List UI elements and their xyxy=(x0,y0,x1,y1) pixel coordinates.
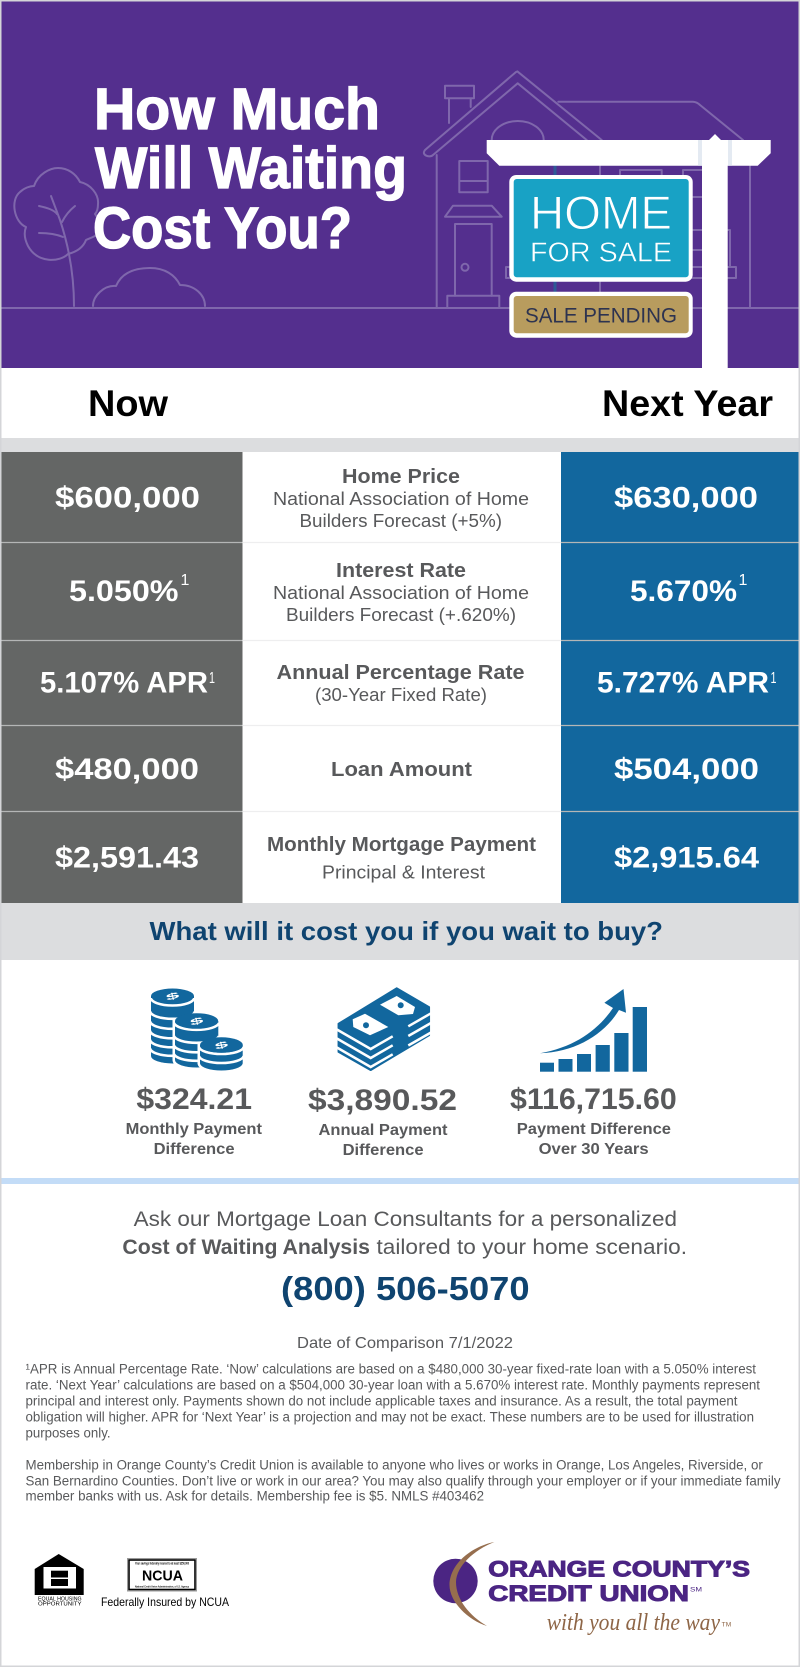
footnote: membership: San Bernardino Counties. Don’t live or work in our area? You may also qualify through your employer or if your immediate family xyxy=(26,1473,781,1488)
row: interest rate: Interest Rate xyxy=(336,560,466,582)
stat: monthly difference xyxy=(126,1083,263,1158)
row: interest rate: Builders Forecast (+.620%) xyxy=(286,605,516,625)
sign: home for sale: FOR SALE xyxy=(530,237,672,268)
row: annual percentage rate: (30-Year Fixed Rate) xyxy=(315,685,487,705)
row: loan amount: $504,000 xyxy=(614,753,759,786)
stat: monthly difference: Difference xyxy=(154,1141,235,1158)
logo: orange county's credit union: CREDIT UNION xyxy=(488,1581,689,1606)
panel: hero header xyxy=(2,2,798,368)
row: loan amount: $480,000 xyxy=(55,753,199,786)
illustration: blue drop line xyxy=(554,165,556,292)
row: monthly mortgage payment: Monthly Mortgage Payment xyxy=(267,834,536,856)
title: Cost You? xyxy=(93,196,352,261)
footnote: apr disclosure: ¹APR is Annual Percentage Rate. ‘Now’ calculations are based on a $480,000 30-year fixed-rate loan with a 5.050% interest xyxy=(26,1361,756,1376)
footnote: membership: member banks with us. Ask for details. Membership fee is $5. NMLS #403462 xyxy=(26,1488,484,1504)
footnote: apr disclosure: obligation will higher. APR for ‘Next Year’ is a projection and may not be exact. These numbers are to be used for illustration xyxy=(26,1409,754,1424)
row: annual percentage rate: 1 xyxy=(770,670,777,687)
logo: orange county's credit union: TM xyxy=(722,1622,731,1629)
logo: orange county's credit union: ORANGE COUNTY’S xyxy=(488,1557,750,1582)
stat: thirty year difference: $116,715.60 xyxy=(510,1083,677,1116)
logo: orange county's credit union xyxy=(433,1542,750,1636)
stat: monthly difference: Monthly Payment xyxy=(126,1121,263,1138)
footnote: apr disclosure: principal and interest only. Payments shown do not include applicable taxes and insurance. As a result, the total payment xyxy=(26,1393,738,1408)
row: loan amount: Loan Amount xyxy=(331,759,472,781)
illustration: house outline xyxy=(424,71,750,307)
sign: sale pending xyxy=(509,292,693,338)
row: home price: Builders Forecast (+5%) xyxy=(300,511,502,531)
stat: thirty year difference xyxy=(510,1083,677,1158)
row: home price: $630,000 xyxy=(614,482,758,514)
icon: coin stacks: $ xyxy=(189,1015,204,1028)
title: Will Waiting xyxy=(95,136,407,201)
row: home price xyxy=(55,466,758,531)
banner: what will it cost: What will it cost you if you wait to buy? xyxy=(150,916,663,946)
sign: home for sale xyxy=(509,175,693,282)
row: annual percentage rate xyxy=(40,662,777,705)
row: annual percentage rate: 1 xyxy=(209,670,215,687)
footnote: membership: Membership in Orange County’s Credit Union is available to anyone who lives or works in Orange, Los Angeles, Riverside, or xyxy=(26,1457,763,1472)
row: interest rate: National Association of Home xyxy=(273,583,529,603)
divider: light blue band xyxy=(2,1178,798,1184)
stat: annual difference: Annual Payment xyxy=(318,1122,448,1139)
stat: annual difference: $3,890.52 xyxy=(308,1084,457,1117)
row: loan amount xyxy=(55,753,759,786)
row: annual percentage rate: 5.727% APR xyxy=(597,666,769,700)
footnote: apr disclosure: purposes only. xyxy=(26,1425,110,1440)
logo: equal housing opportunity xyxy=(35,1554,84,1608)
row: interest rate: 1 xyxy=(738,572,748,589)
panel: comparison table xyxy=(2,438,798,903)
row: interest rate: 5.050% xyxy=(69,575,178,608)
call to action text xyxy=(122,1208,687,1259)
heading: now: Now xyxy=(88,383,168,424)
logo: ncua: Your savings federally insured to at least $250,000 xyxy=(135,1562,189,1566)
row: monthly mortgage payment xyxy=(55,834,759,882)
call to action text: Ask our Mortgage Loan Consultants for a personalized xyxy=(134,1208,677,1231)
icon: coin stacks: $ xyxy=(165,990,180,1003)
illustration: sign post xyxy=(487,134,771,368)
icon: rising bar chart with arrow xyxy=(540,989,647,1072)
icon: cash stack xyxy=(336,988,431,1070)
row: monthly mortgage payment: $2,591.43 xyxy=(55,842,199,874)
footnote: apr disclosure xyxy=(26,1361,760,1440)
stat: annual difference: Difference xyxy=(343,1142,424,1159)
logo: ncua: NCUA xyxy=(142,1568,183,1585)
stat: monthly difference: $324.21 xyxy=(136,1083,252,1116)
row: interest rate: 5.670% xyxy=(630,575,737,608)
illustration: ground line xyxy=(2,307,798,309)
logo: orange county's credit union: SM xyxy=(690,1587,702,1594)
row: home price: $600,000 xyxy=(55,482,200,514)
logo: ncua: Federally Insured by NCUA xyxy=(101,1595,229,1609)
logo: ncua: National Credit Union Administration, a U.S. Agency xyxy=(135,1584,189,1588)
panel: cost summary xyxy=(126,988,677,1159)
stat: thirty year difference: Payment Difference xyxy=(517,1121,671,1138)
sign: sale pending: SALE PENDING xyxy=(525,304,677,327)
phone number: (800) 506-5070 xyxy=(281,1270,530,1307)
footnote: apr disclosure: rate. ‘Next Year’ calculations are based on a $504,000 30-year loan with a 5.670% interest rate. Monthly payments represent xyxy=(26,1377,760,1392)
footnote: membership xyxy=(26,1457,781,1504)
row: monthly mortgage payment: $2,915.64 xyxy=(614,842,759,874)
row: home price: Home Price xyxy=(342,466,460,488)
icon: coin stacks xyxy=(150,988,244,1070)
illustration: tree outline xyxy=(14,168,99,306)
logo: orange county's credit union: with you all the way xyxy=(547,1610,720,1636)
row: interest rate: 1 xyxy=(180,572,190,589)
sign: home for sale: HOME xyxy=(530,186,672,239)
icon: coin stacks: $ xyxy=(214,1039,229,1052)
row: interest rate xyxy=(69,560,748,625)
row: monthly mortgage payment: Principal & Interest xyxy=(322,862,485,882)
title xyxy=(93,77,407,261)
title: How Much xyxy=(94,77,380,142)
logo: equal housing opportunity: OPPORTUNITY xyxy=(38,1602,82,1608)
row: annual percentage rate: Annual Percentage Rate xyxy=(276,662,524,684)
call to action text: Cost of Waiting Analysis xyxy=(122,1236,370,1259)
heading: next year: Next Year xyxy=(602,383,773,424)
call to action text: tailored to your home scenario. xyxy=(376,1236,687,1259)
illustration: bush outline xyxy=(93,268,205,306)
date of comparison: Date of Comparison 7/1/2022 xyxy=(297,1335,513,1352)
logo: ncua xyxy=(101,1558,229,1609)
stat: thirty year difference: Over 30 Years xyxy=(539,1141,649,1158)
stat: annual difference xyxy=(308,1084,457,1159)
logo: equal housing opportunity: EQUAL HOUSING xyxy=(38,1596,82,1602)
row: home price: National Association of Home xyxy=(273,489,529,509)
banner: what will it cost xyxy=(2,903,798,960)
row: annual percentage rate: 5.107% APR xyxy=(40,666,208,700)
